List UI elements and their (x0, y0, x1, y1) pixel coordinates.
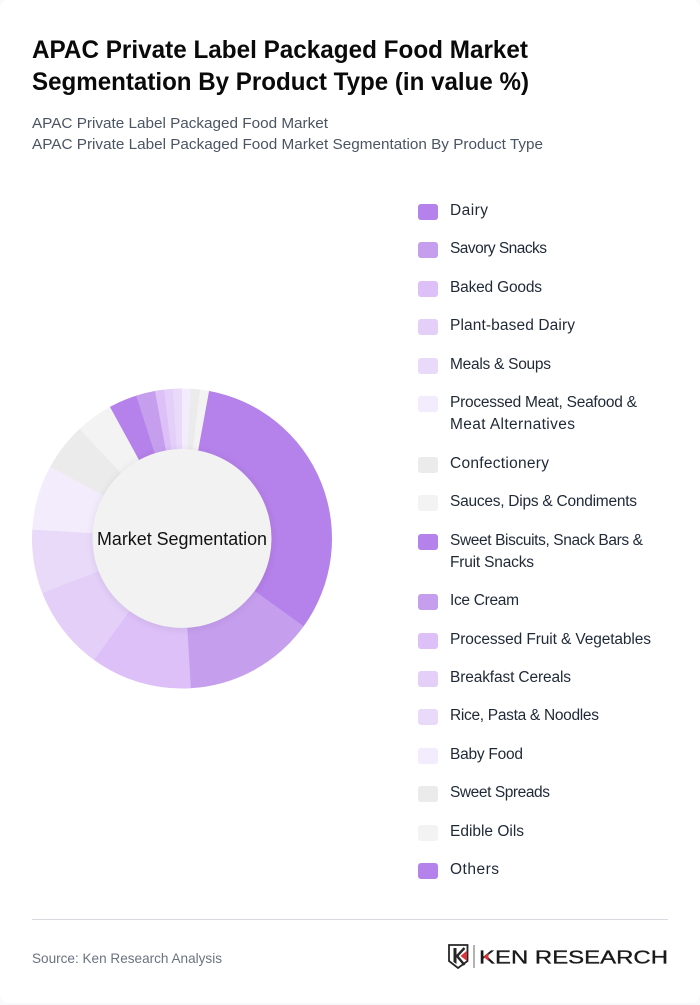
subtitle: APAC Private Label Packaged Food Market Segmentation By Product Type (32, 136, 543, 153)
legend item: Breakfast Cereals: Breakfast Cereals (450, 669, 571, 686)
source note: Source: Ken Research Analysis (32, 951, 222, 966)
legend item: Sweet Biscuits, Snack Bars & Fruit Snacks (418, 532, 644, 571)
legend item: Sweet Spreads: Sweet Spreads (450, 784, 550, 801)
legend item: Confectionery: Confectionery (450, 455, 549, 472)
legend item: Processed Fruit & Vegetables: Processed Fruit & Vegetables (450, 631, 651, 648)
subtitle: APAC Private Label Packaged Food Market (32, 115, 329, 132)
legend item: Edible Oils: Edible Oils (450, 823, 524, 840)
legend item: Processed Meat, Seafood & Meat Alternatives (418, 394, 638, 433)
legend item: Others: Others (450, 861, 499, 878)
donut centre (92, 449, 272, 630)
subtitle (32, 115, 543, 153)
title (32, 36, 529, 96)
legend item: Meals & Soups: Meals & Soups (450, 356, 551, 373)
legend item: Baked Goods (418, 279, 542, 297)
logo: Ken Research: KEN RESEARCH (479, 948, 668, 968)
legend item: Others (418, 861, 499, 879)
legend item: Plant-based Dairy: Plant-based Dairy (450, 317, 575, 334)
title: Segmentation By Product Type (in value %) (32, 68, 529, 96)
legend (418, 202, 651, 879)
title: APAC Private Label Packaged Food Market (32, 36, 529, 64)
legend item: Dairy: Dairy (450, 202, 488, 219)
legend item: Rice, Pasta & Noodles: Rice, Pasta & Noodles (450, 707, 599, 724)
logo: Ken Research (449, 945, 668, 968)
donut chart (32, 388, 332, 688)
legend item: Sweet Biscuits, Snack Bars & Fruit Snacks: Sweet Biscuits, Snack Bars & (450, 532, 644, 549)
legend item: Baked Goods: Baked Goods (450, 279, 542, 296)
legend item: Sauces, Dips & Condiments: Sauces, Dips & Condiments (450, 493, 637, 510)
legend item: Ice Cream: Ice Cream (450, 592, 519, 609)
legend item: Sweet Biscuits, Snack Bars & Fruit Snacks: Fruit Snacks (450, 554, 534, 571)
legend item: Processed Meat, Seafood & Meat Alternatives: Meat Alternatives (450, 416, 575, 433)
legend item: Savory Snacks: Savory Snacks (450, 240, 547, 257)
donut centre: Market Segmentation (97, 529, 267, 549)
legend item: Edible Oils (418, 823, 524, 841)
legend item: Dairy (418, 202, 488, 220)
legend item: Ice Cream (418, 592, 519, 610)
icon: shield (449, 945, 468, 968)
legend item: Baby Food (418, 746, 523, 764)
legend item: Baby Food: Baby Food (450, 746, 523, 763)
legend item: Processed Meat, Seafood & Meat Alternatives: Processed Meat, Seafood & (450, 394, 638, 411)
